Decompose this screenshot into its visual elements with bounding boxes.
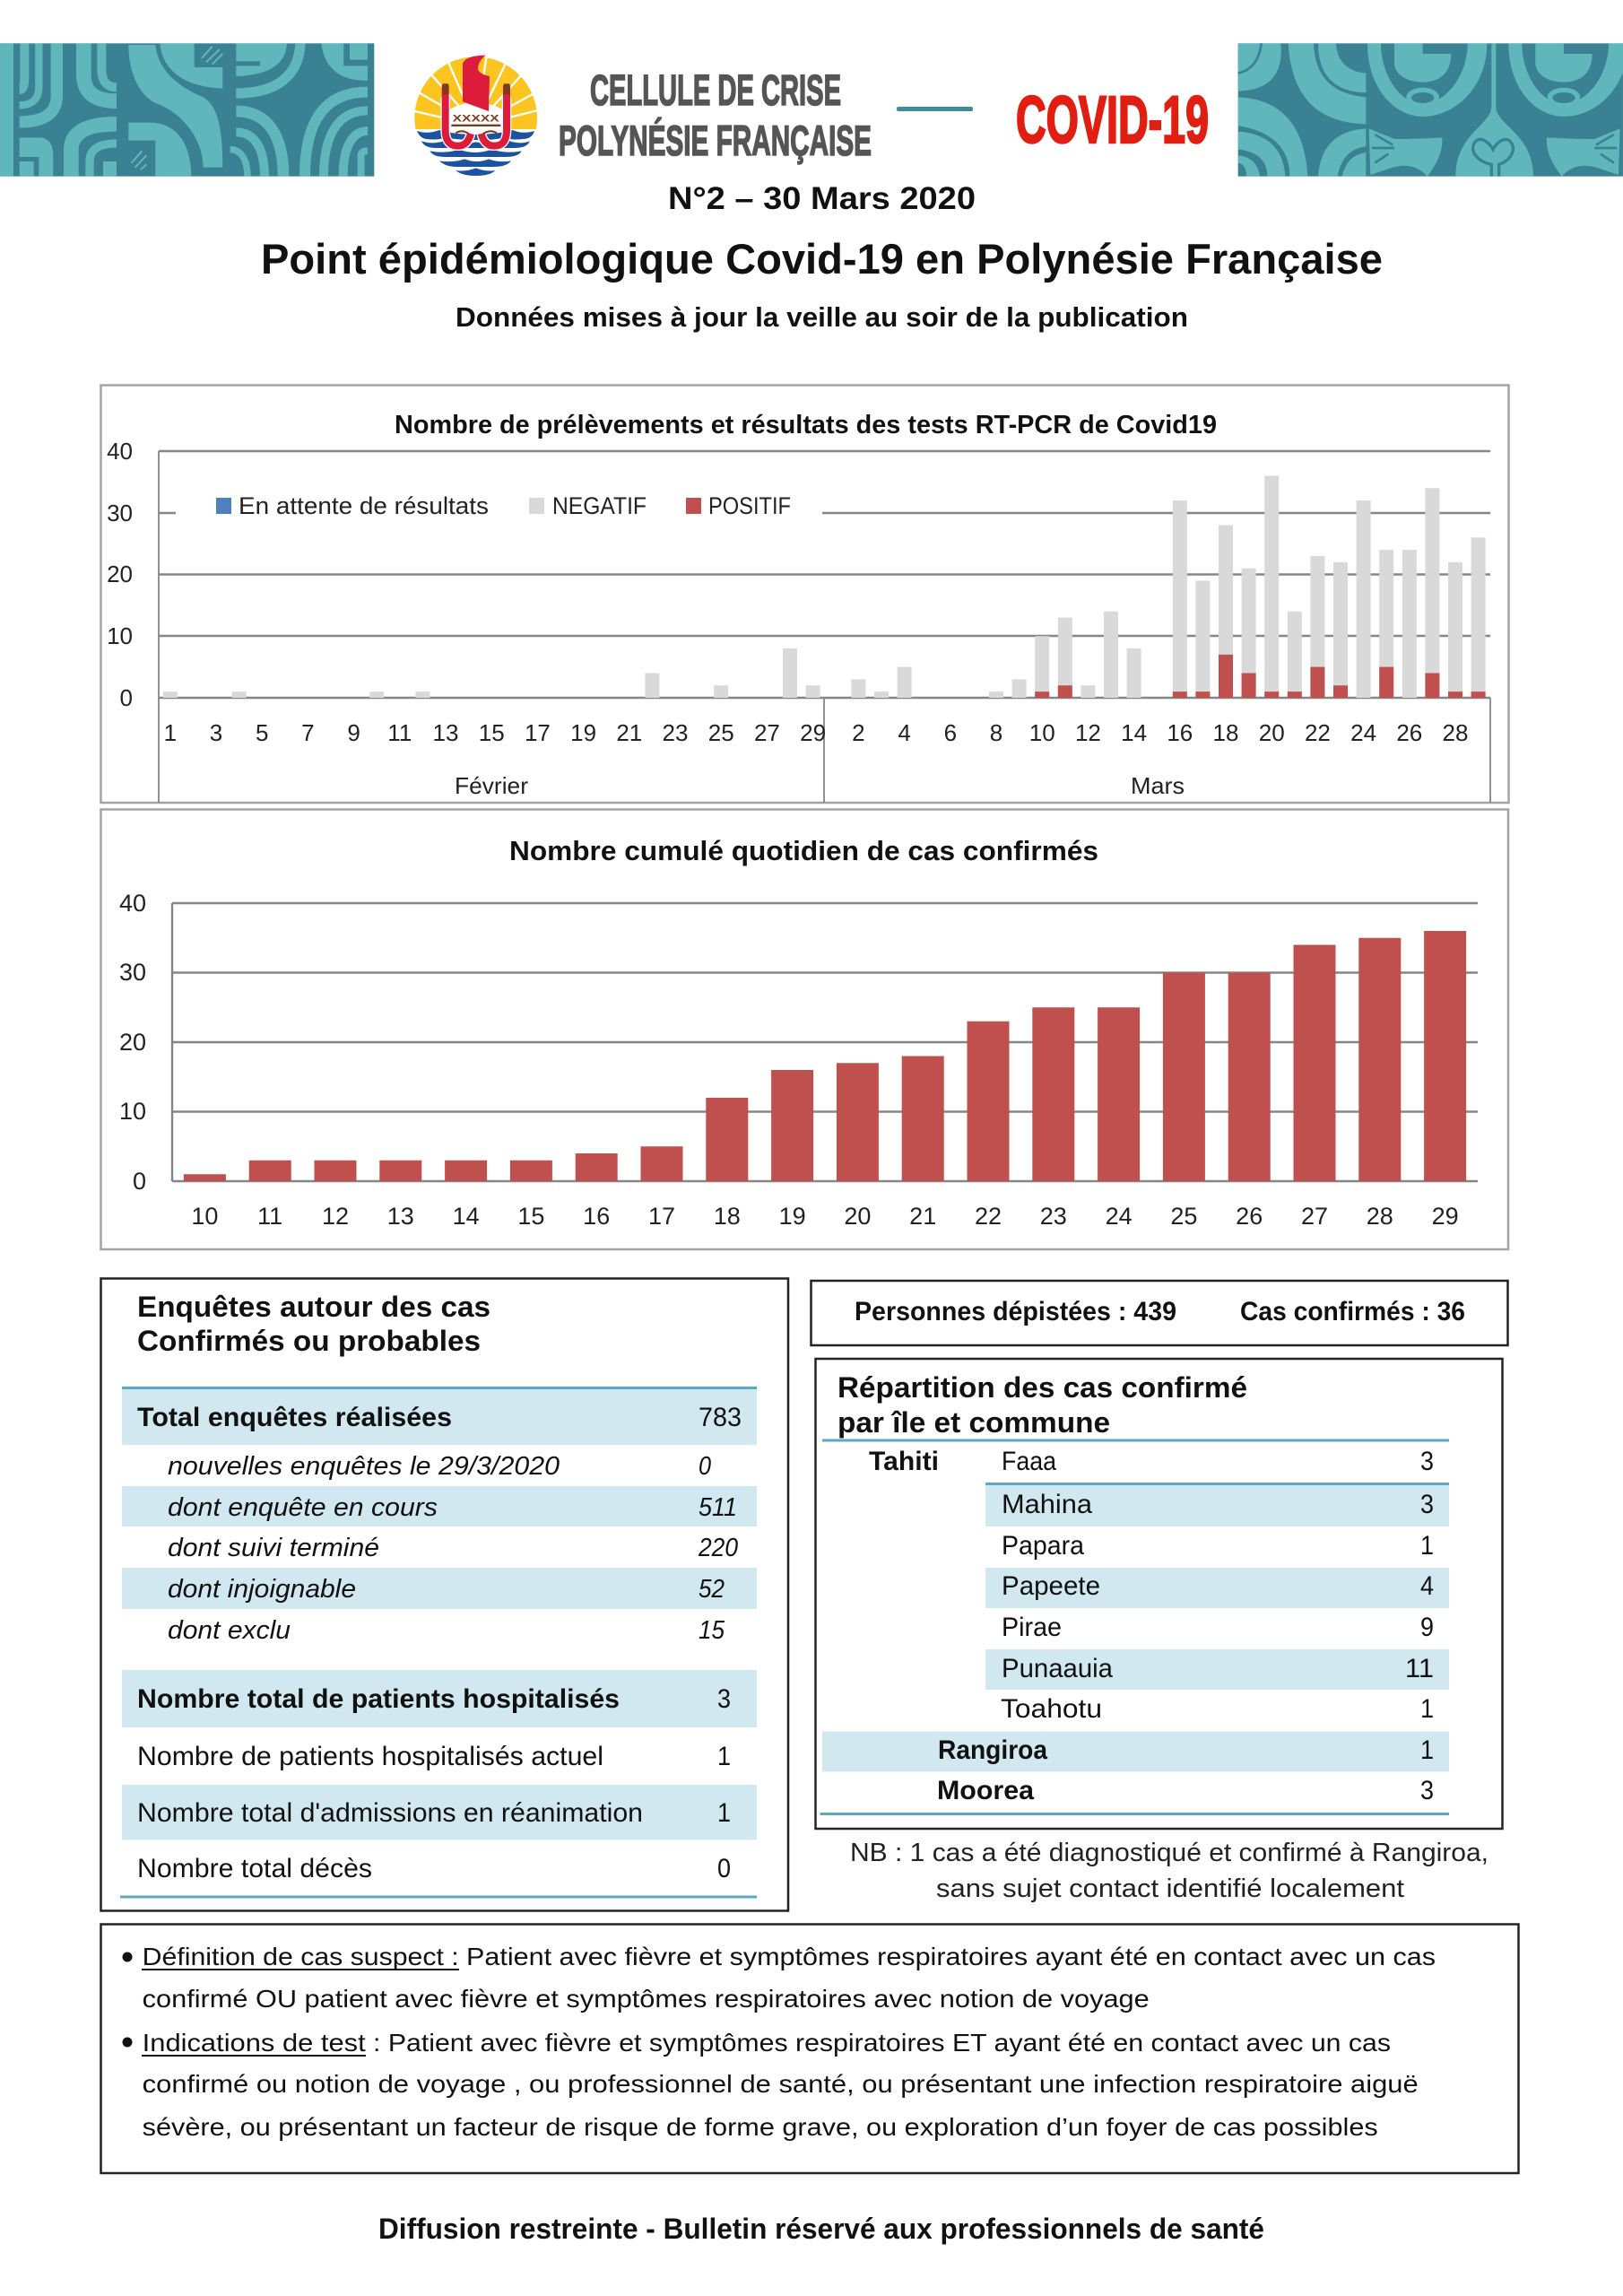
panel: enquêtes autour des cas [100,1279,788,1910]
row: Punaauia [1002,1654,1434,1683]
row: Moorea: Moorea [937,1776,1035,1805]
row: total hospitalisés: Nombre total de patients hospitalisés [137,1684,620,1714]
row: exclu: 15 [699,1616,725,1645]
table rules [820,1440,1449,1813]
test indications [122,2029,1419,2141]
x axis labels: 15 [517,1203,544,1230]
panel heading: répartition: Répartition des cas confirmé [838,1371,1247,1404]
row: Pirae: Pirae [1002,1613,1062,1642]
gridlines and axes [159,451,1490,803]
row: nouvelles enquêtes: nouvelles enquêtes le 29/3/2020 [168,1452,560,1481]
row: Toahotu: 1 [1420,1694,1434,1724]
row: exclu [168,1616,725,1645]
x axis labels: 27 [1301,1203,1328,1230]
row: total enquêtes: Total enquêtes réalisées [137,1403,452,1432]
x axis labels: 12 [322,1203,349,1230]
x axis labels: 22 [975,1203,1002,1230]
panel heading: enquêtes: Confirmés ou probables [137,1325,481,1357]
row: Toahotu [1001,1694,1434,1724]
row: Toahotu: Toahotu [1001,1694,1102,1724]
test indications: confirmé ou notion de voyage , ou professionnel de santé, ou présentant une infection respiratoire aiguë [143,2070,1419,2098]
definition of suspect case: Patient avec fièvre et symptômes respiratoires ayant été en contact avec un cas [466,1943,1436,1970]
header title: cellule de crise: CELLULE DE CRISE [590,67,841,115]
y axis labels: 30 [119,959,146,986]
header title: cellule de crise: POLYNÉSIE FRANÇAISE [559,117,872,164]
panel heading: enquêtes [137,1291,490,1357]
row: total enquêtes [137,1403,742,1432]
x axis labels: march: 26 [1396,719,1422,746]
row: décès: Nombre total décès [137,1854,372,1883]
panel: personnes dépistées et cas confirmés: Personnes dépistées : 439 [855,1297,1176,1326]
x axis labels: february: 23 [663,719,688,746]
row: réanimation: 1 [717,1798,731,1828]
x axis labels: february: 29 [800,719,826,746]
row: Papeete: 4 [1420,1571,1434,1601]
panel heading: répartition: par île et commune [838,1406,1110,1439]
test indications: : Patient avec fièvre et symptômes respiratoires ET ayant été en contact avec un cas [373,2029,1391,2057]
row: Rangiroa: Rangiroa [938,1735,1048,1765]
issue number and date: N°2 – 30 Mars 2020 [668,181,976,216]
row: total enquêtes: 783 [699,1403,742,1432]
legend: POSITIF [708,492,791,519]
definition of suspect case: confirmé OU patient avec fièvre et symptômes respiratoires avec notion de voyage [143,1985,1150,2013]
month labels [455,772,1185,799]
x axis labels: february: 25 [708,719,734,746]
x axis labels: 29 [1432,1203,1459,1230]
row: Pirae: 9 [1420,1613,1434,1642]
row: suivi terminé: dont suivi terminé [168,1534,379,1562]
test indications: Indications de test [143,2029,366,2057]
y axis labels: 20 [119,1029,146,1056]
x axis labels: march: 6 [944,719,957,746]
y axis labels: 10 [107,622,133,649]
x axis labels: march: 24 [1350,719,1376,746]
y axis labels: 10 [119,1098,146,1125]
row: Papara [1002,1531,1434,1561]
gridlines and axis [172,903,1478,1181]
y axis labels: 30 [107,500,133,526]
x axis labels: february: 13 [433,719,458,746]
header title: cellule de crise [559,67,872,164]
row: injoignable: 52 [699,1575,725,1604]
row: exclu: dont exclu [168,1616,291,1645]
row: injoignable [168,1575,725,1604]
header banner: right polynesian pattern [1238,43,1623,177]
x axis labels: 20 [844,1203,871,1230]
panel: personnes dépistées et cas confirmés: Cas confirmés : 36 [1240,1297,1465,1326]
island label: Tahiti: Tahiti [869,1447,939,1476]
month labels: Mars [1131,772,1185,799]
row: Papara: 1 [1420,1531,1434,1561]
table row backgrounds [122,1389,757,1840]
x axis labels: february: 15 [479,719,505,746]
panel: définitions [100,1925,1519,2173]
x axis labels: 17 [648,1203,675,1230]
x axis labels: march: 16 [1167,719,1193,746]
y axis labels: 40 [107,438,133,465]
definition of suspect case [122,1943,1436,2013]
row: Moorea [937,1776,1434,1805]
y axis labels [119,890,146,1195]
x axis labels: march: 2 [852,719,865,746]
row: Mahina [1002,1490,1434,1519]
row: réanimation: Nombre total d'admissions en réanimation [137,1798,643,1828]
note: Rangiroa: NB : 1 cas a été diagnostiqué et confirmé à Rangiroa, [850,1839,1488,1867]
row: hospitalisés actuel: Nombre de patients hospitalisés actuel [137,1742,603,1771]
x axis labels: 24 [1106,1203,1133,1230]
x axis labels: 14 [453,1203,480,1230]
row: Mahina: Mahina [1002,1490,1093,1519]
x axis labels: february: 17 [525,719,551,746]
row: hospitalisés actuel: 1 [717,1742,731,1771]
x axis labels: march: 4 [898,719,911,746]
legend: NEGATIF [552,492,647,519]
x axis labels: february: 5 [256,719,268,746]
row: Rangiroa [938,1735,1434,1765]
y axis labels [107,438,133,711]
row: décès: 0 [717,1854,731,1883]
x axis labels: february: 3 [210,719,222,746]
header title: COVID-19: COVID-19 [1016,83,1209,157]
x axis labels: february: 1 [164,719,177,746]
x axis labels: february: 27 [754,719,780,746]
row: décès [137,1854,731,1883]
subtitle: Données mises à jour la veille au soir de la publication [456,301,1188,333]
panel: cumulative confirmed cases chart [100,809,1508,1249]
row backgrounds [822,1484,1449,1772]
row: Papeete: Papeete [1002,1571,1100,1601]
table rules [120,1388,757,1897]
x axis labels: 18 [714,1203,741,1230]
x axis labels: march: 28 [1443,719,1468,746]
x axis labels: 16 [583,1203,610,1230]
header banner: left polynesian pattern [0,43,374,177]
row: total hospitalisés: 3 [717,1684,731,1714]
legend: En attente de résultats [239,492,489,519]
bars: positive tests [1035,655,1486,698]
row: nouvelles enquêtes: 0 [699,1452,711,1481]
row: enquête en cours: 511 [699,1493,737,1522]
row: enquête en cours: dont enquête en cours [168,1493,438,1522]
row: Mahina: 3 [1420,1490,1434,1519]
x axis labels: march: 22 [1305,719,1331,746]
panel heading: enquêtes: Enquêtes autour des cas [137,1291,490,1323]
legend [216,492,791,519]
x axis labels: 21 [909,1203,936,1230]
row: nouvelles enquêtes [168,1452,711,1481]
x axis labels: february: 19 [570,719,596,746]
x axis labels: march: 14 [1121,719,1147,746]
chart title: cumulative: Nombre cumulé quotidien de cas confirmés [509,835,1098,866]
row: suivi terminé: 220 [698,1534,738,1562]
y axis labels: 40 [119,890,146,917]
x axis labels: february: 9 [347,719,360,746]
panel: personnes dépistées et cas confirmés [811,1281,1508,1345]
x axis labels [191,1203,1459,1230]
panel heading: répartition [838,1371,1247,1439]
test indications: sévère, ou présentant un facteur de risque de forme grave, ou exploration d’un foyer de cas possibles [143,2113,1378,2141]
x axis labels: 23 [1040,1203,1067,1230]
x axis labels: 28 [1367,1203,1393,1230]
main title: Point épidémiologique Covid-19 en Polynésie Française [261,235,1383,283]
logo: coat of arms of French Polynesia: XXXXX [453,114,499,125]
definition of suspect case: Définition de cas suspect : [143,1943,459,1970]
row: Faaa: 3 [1420,1447,1434,1476]
row: Moorea: 3 [1420,1776,1434,1805]
y axis labels: 0 [120,684,133,711]
row: enquête en cours [168,1493,737,1522]
x axis labels: march: 12 [1075,719,1101,746]
chart title: tests: Nombre de prélèvements et résultats des tests RT-PCR de Covid19 [395,411,1217,439]
x axis labels: march: 8 [990,719,1002,746]
x axis labels: february: 7 [301,719,315,746]
x axis labels: 26 [1236,1203,1263,1230]
row: Papara: Papara [1002,1531,1085,1561]
footer notice: Diffusion restreinte - Bulletin réservé aux professionnels de santé [378,2213,1264,2245]
month labels: Février [455,772,528,799]
x axis labels: 11 [257,1203,282,1230]
row: Punaauia: 11 [1405,1654,1434,1683]
x axis labels: march: 20 [1259,719,1285,746]
row: Punaauia: Punaauia [1002,1654,1114,1683]
row: Papeete [1002,1571,1434,1601]
y axis labels: 20 [107,561,133,587]
panel: chart tests RT-PCR [100,386,1508,803]
bars: negative tests [163,475,1486,698]
row: Faaa: Faaa [1002,1447,1057,1476]
bars: cumulative cases [184,931,1466,1181]
row: injoignable: dont injoignable [168,1575,356,1604]
x axis labels: 13 [387,1203,414,1230]
note: Rangiroa [850,1839,1488,1903]
header dash [897,107,973,111]
y axis labels: 0 [133,1168,146,1195]
x axis labels: 19 [779,1203,806,1230]
x axis labels: march [852,719,1468,746]
panel: répartition des cas [816,1359,1503,1829]
row: suivi terminé [168,1534,738,1562]
logo: coat of arms of French Polynesia [412,52,540,179]
x axis labels: 10 [191,1203,218,1230]
x axis labels: march: 10 [1029,719,1055,746]
note: Rangiroa: sans sujet contact identifié localement [936,1874,1404,1903]
row: Pirae [1002,1613,1434,1642]
x axis labels: february: 11 [387,719,412,746]
x axis labels: february [164,719,826,746]
x axis labels: march: 18 [1213,719,1238,746]
x axis labels: february: 21 [616,719,642,746]
x axis labels: 25 [1170,1203,1197,1230]
row: Faaa [1002,1447,1434,1476]
row: Rangiroa: 1 [1420,1735,1434,1765]
